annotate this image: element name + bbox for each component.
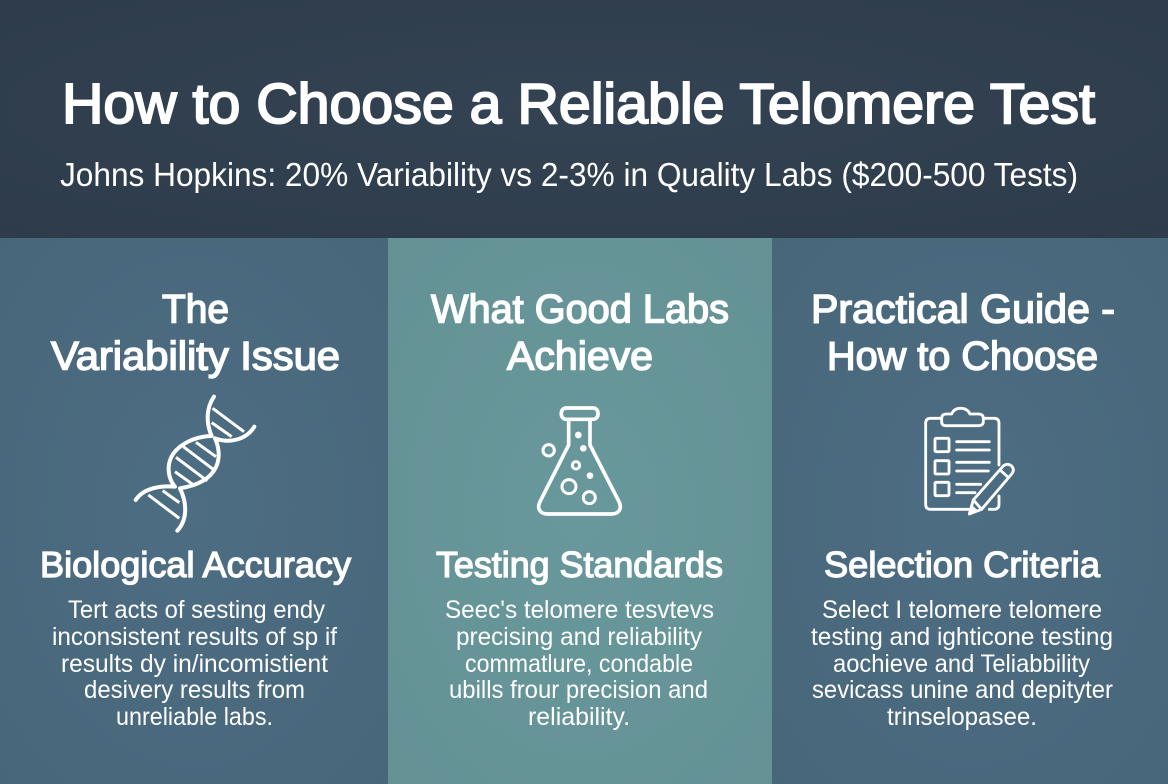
body text: testing standards: precising and reliability xyxy=(456,623,702,651)
header banner xyxy=(0,0,1168,238)
icon: flask xyxy=(539,408,620,514)
body text: testing standards: reliability. xyxy=(528,703,630,731)
heading: what good labs achieve xyxy=(431,288,729,378)
body text: biological accuracy: Tert acts of sesting endy xyxy=(68,596,325,624)
title: How to Choose a Reliable Telomere Test xyxy=(62,72,1095,136)
body text: biological accuracy: desivery results from xyxy=(84,676,305,704)
subtitle: Johns Hopkins: 20% Variability vs 2-3% in Quality Labs ($200-500 Tests) xyxy=(60,157,1078,194)
body text: testing standards: commatlure, condable xyxy=(465,650,693,678)
heading: what good labs achieve: Achieve xyxy=(507,334,653,378)
body text: biological accuracy: results dy in/incomistient xyxy=(61,650,328,678)
heading: practical guide: How to Choose xyxy=(827,334,1098,378)
subheading: biological accuracy: Biological Accuracy xyxy=(40,544,351,585)
subheading: selection criteria: Selection Criteria xyxy=(824,544,1101,585)
body text: selection criteria: aochieve and Teliabbility xyxy=(833,650,1090,678)
body text: selection criteria: trinselopasee. xyxy=(887,703,1037,731)
body text: biological accuracy: unreliable labs. xyxy=(116,703,273,731)
panel: the variability issue xyxy=(0,238,388,784)
body text: selection criteria xyxy=(811,596,1113,731)
body text: selection criteria: sevicass unine and depityter xyxy=(812,676,1113,704)
panel: what good labs achieve xyxy=(388,238,772,784)
body text: testing standards: ubills frour precision and xyxy=(449,676,708,704)
heading: the variability issue: The xyxy=(162,288,229,332)
body text: selection criteria: Select I telomere telomere xyxy=(822,596,1102,624)
icon: dna helix xyxy=(136,397,254,531)
heading: the variability issue: Variability Issue xyxy=(51,334,340,378)
icon: clipboard checklist with pencil xyxy=(926,408,1013,514)
heading: the variability issue xyxy=(51,288,340,378)
heading: practical guide: Practical Guide - xyxy=(811,288,1115,332)
heading: what good labs achieve: What Good Labs xyxy=(431,288,729,332)
body text: biological accuracy xyxy=(52,596,337,731)
body text: biological accuracy: inconsistent results of sp if xyxy=(52,623,337,651)
body text: selection criteria: testing and ighticone testing xyxy=(811,623,1113,651)
body text: testing standards xyxy=(445,596,714,731)
subheading: testing standards: Testing Standards xyxy=(436,544,723,585)
panel: practical guide xyxy=(772,238,1168,784)
body text: testing standards: Seec's telomere tesvtevs xyxy=(445,596,714,624)
heading: practical guide xyxy=(811,288,1115,378)
